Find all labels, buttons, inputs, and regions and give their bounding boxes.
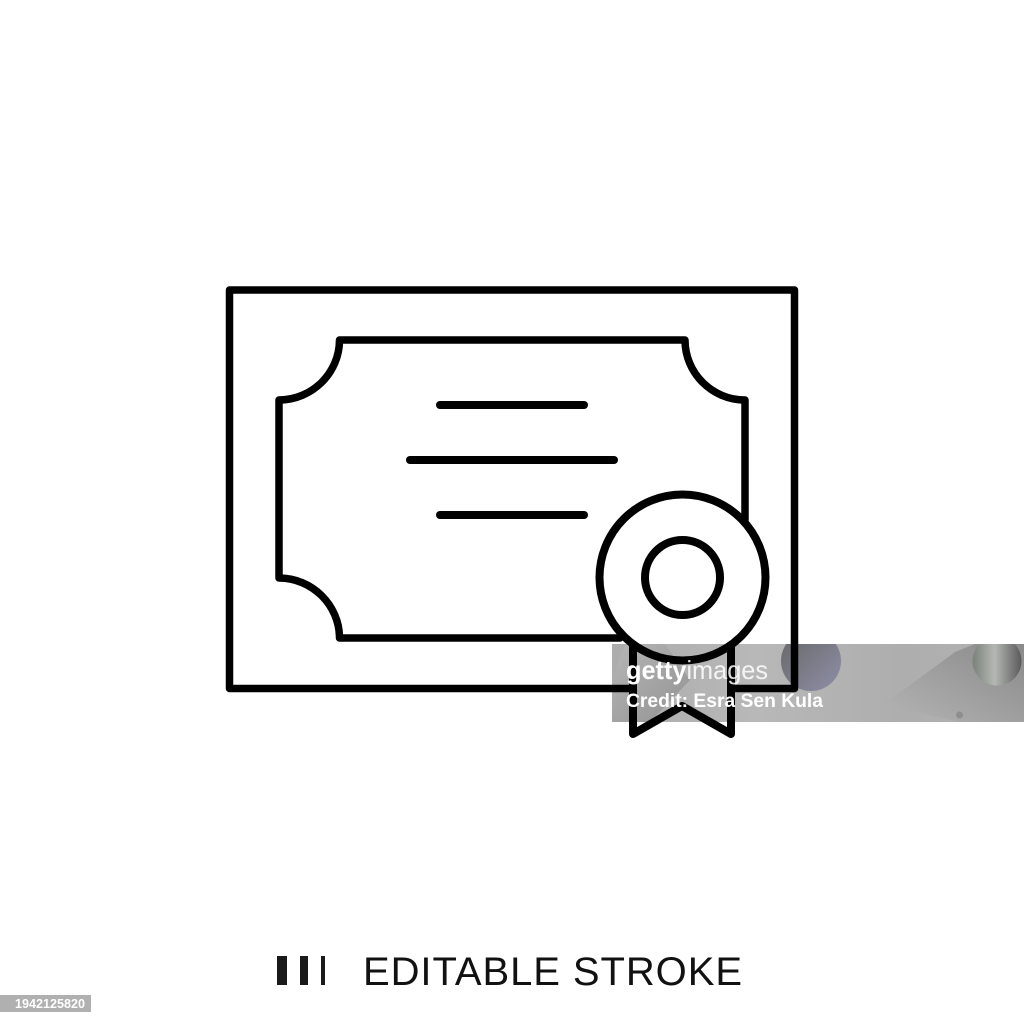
editable stroke caption xyxy=(277,950,742,994)
icon: certificate xyxy=(230,290,794,734)
certificate inner scalloped border xyxy=(279,340,745,638)
icon: stroke weight bars xyxy=(277,956,325,985)
watermark band xyxy=(612,644,1024,722)
icon: seal rosette xyxy=(600,494,766,660)
watermark logo text: gettyimages xyxy=(626,655,768,685)
icon: ribbon tails xyxy=(633,640,731,734)
certificate outer frame xyxy=(230,290,794,688)
image id tag xyxy=(0,995,91,1012)
watermark credit text: Credit: Esra Sen Kula xyxy=(626,691,823,712)
caption text: EDITABLE STROKE xyxy=(363,950,742,994)
tag background xyxy=(0,995,91,1012)
infographic canvas xyxy=(0,286,1024,1012)
band background xyxy=(612,644,1024,722)
text lines on certificate xyxy=(410,405,614,515)
image id number: 1942125820 xyxy=(15,997,85,1011)
